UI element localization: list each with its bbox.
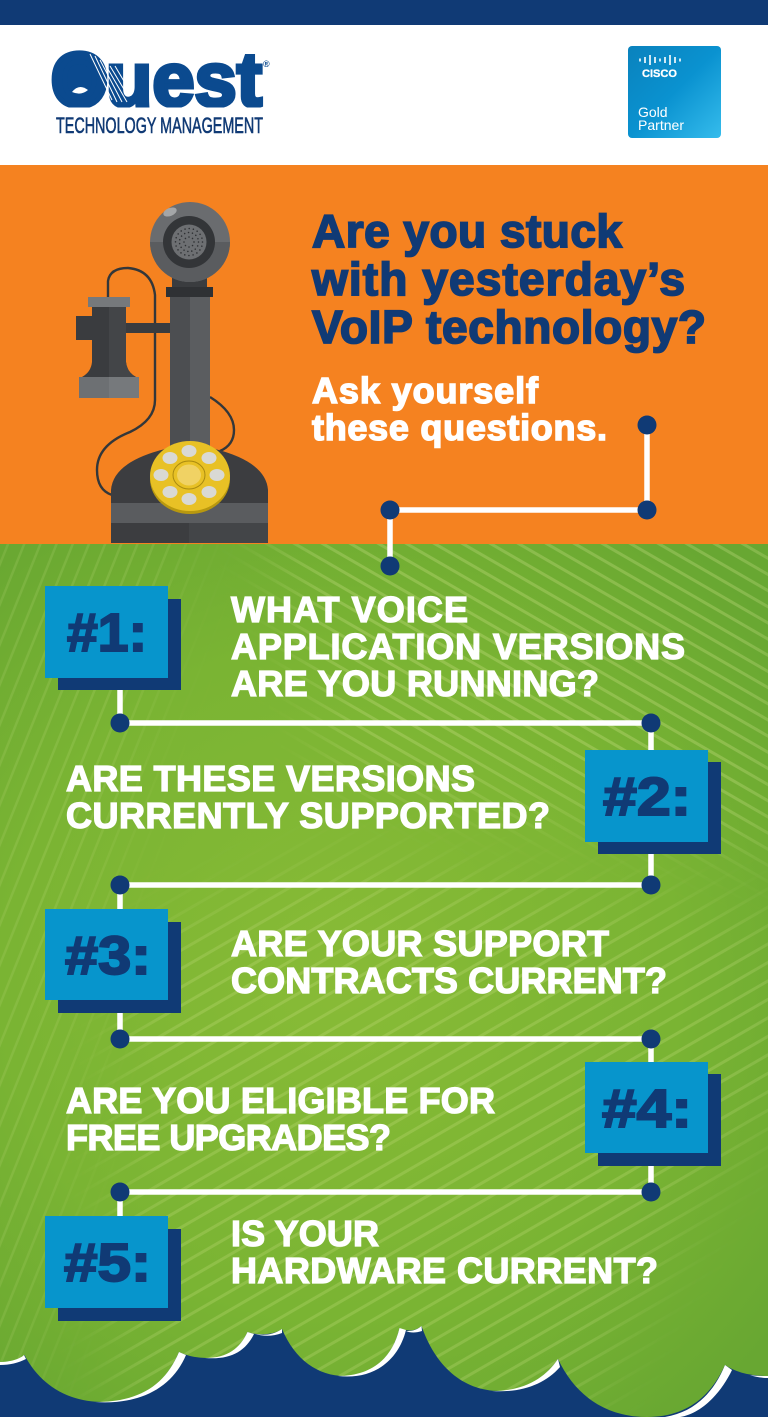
badge #3: #3:	[65, 926, 151, 986]
icon: candlestick telephone	[76, 202, 268, 543]
footer navy scalloped band	[0, 1326, 768, 1417]
logo: Quest Technology Management: Q	[51, 38, 108, 123]
green questions panel	[0, 544, 768, 1417]
subheading: these questions.	[312, 407, 607, 448]
question 4	[66, 1080, 495, 1158]
badge #2: #2:	[603, 767, 691, 827]
logo: Quest Technology Management	[52, 50, 270, 134]
top navy bar	[0, 0, 768, 25]
orange hero panel	[0, 165, 768, 544]
question 3	[231, 923, 667, 1001]
headline: VoIP technology?	[312, 301, 706, 353]
question 4: ARE YOU ELIGIBLE FOR	[66, 1080, 495, 1121]
rotary dial	[150, 441, 230, 514]
connector 3 to 4	[110, 1013, 660, 1062]
connector 4 to 5	[110, 1166, 660, 1216]
phone cords	[97, 268, 234, 495]
question 1: ARE YOU RUNNING?	[231, 663, 599, 704]
badge #5: #5:	[64, 1233, 151, 1293]
question 3: CONTRACTS CURRENT?	[231, 960, 667, 1001]
question 1: WHAT VOICE	[231, 589, 468, 630]
badge #3	[45, 909, 181, 1013]
header panel	[52, 46, 721, 138]
question 3: ARE YOUR SUPPORT	[231, 923, 609, 964]
intro connector	[380, 416, 656, 576]
logo: Quest Technology Management: ®	[263, 59, 270, 69]
base	[111, 449, 268, 543]
subheading	[312, 370, 607, 448]
headline: with yesterday’s	[311, 253, 685, 305]
logo: Quest Technology Management: TECHNOLOGY MANAGEMENT	[56, 113, 263, 138]
subheading: Ask yourself	[312, 370, 539, 411]
badge: Cisco Gold Partner: Gold	[638, 104, 668, 120]
badge: Cisco Gold Partner: CISCO	[642, 68, 677, 80]
connector 2 to 3	[110, 854, 660, 909]
question 1	[231, 589, 685, 704]
badge #1	[45, 586, 181, 690]
logo: Quest Technology Management: uest	[106, 38, 262, 123]
question 5: IS YOUR	[231, 1213, 379, 1254]
question 4: FREE UPGRADES?	[66, 1117, 391, 1158]
question 2: ARE THESE VERSIONS	[66, 758, 475, 799]
mouthpiece arm and receiver	[76, 297, 170, 398]
headline	[311, 205, 706, 353]
badge: Cisco Gold Partner: Partner	[638, 117, 684, 133]
question 5: HARDWARE CURRENT?	[231, 1250, 658, 1291]
badge #5	[45, 1216, 181, 1321]
question 5	[231, 1213, 658, 1291]
badge #4	[585, 1062, 721, 1166]
badge: Cisco Gold Partner	[628, 46, 721, 138]
stem	[166, 275, 213, 450]
badge #1: #1:	[67, 603, 147, 663]
question 1: APPLICATION VERSIONS	[231, 626, 685, 667]
badge #4: #4:	[602, 1079, 692, 1139]
earpiece	[150, 202, 230, 282]
headline: Are you stuck	[312, 205, 622, 257]
connector 1 to 2	[110, 690, 660, 750]
question 2: CURRENTLY SUPPORTED?	[66, 795, 550, 836]
badge #2	[585, 750, 721, 854]
question 2	[66, 758, 550, 836]
